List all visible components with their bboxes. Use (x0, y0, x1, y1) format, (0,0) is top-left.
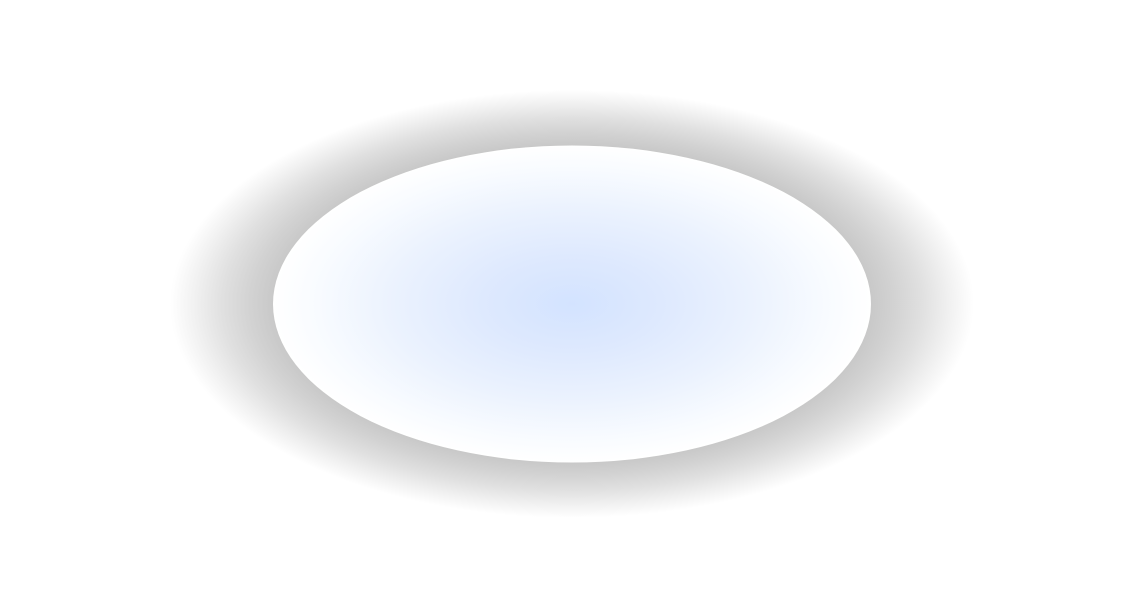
pale blue glowing ellipse (273, 146, 871, 462)
soft gray shadow ellipse (170, 90, 974, 518)
